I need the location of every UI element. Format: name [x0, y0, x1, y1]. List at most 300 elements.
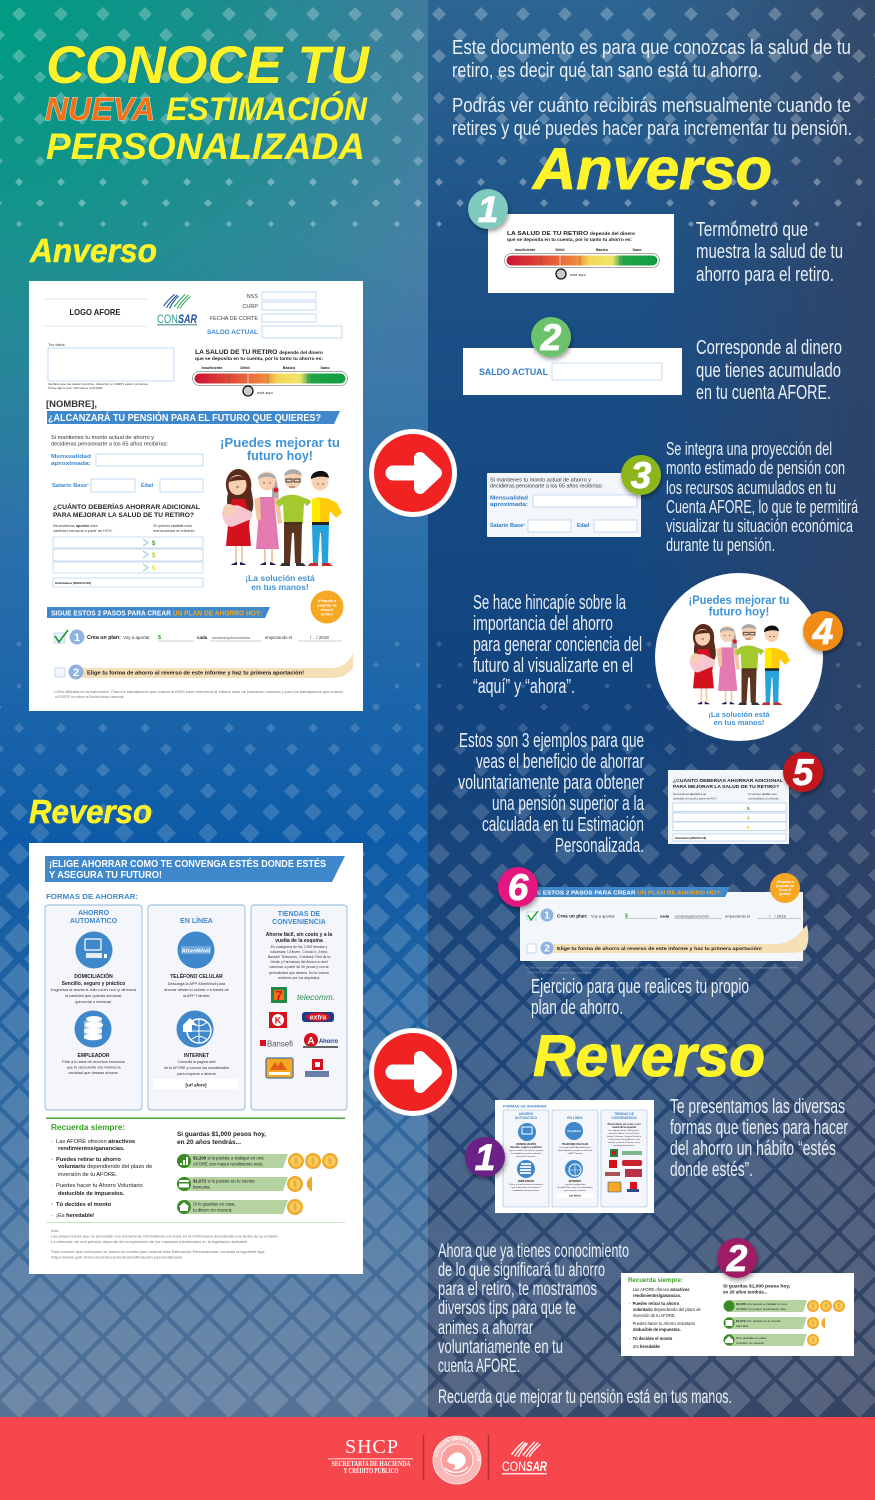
column: ahorro automatico: cantidad que deseas ahorrar. — [68, 1070, 119, 1075]
text: tips: animes a ahorrar — [438, 1318, 533, 1339]
recuerda siempre list — [51, 1123, 152, 1219]
badge r1 — [465, 1137, 505, 1178]
card: formas de ahorrar mini: la cantidad que quieras semanal, — [511, 1152, 542, 1155]
text: proyeccion — [666, 439, 859, 555]
heading: Anverso large: Anverso — [531, 137, 772, 202]
card: thermometer: está aquí — [570, 273, 587, 277]
recuerda siempre list: voluntario dependiendo del plazo de — [58, 1164, 152, 1170]
column: tiendas de conveniencia: comisión por tus depósitos. — [278, 976, 320, 980]
how much to save section: cantidad mensual a partir de HOY: — [53, 528, 112, 533]
how much to save section: $ — [152, 541, 156, 547]
card: recuerda siempre mini: bancaria. — [736, 1324, 749, 1328]
card: thermometer: que se deposita en tu cuenta, por lo tanto tu ahorro es: — [507, 237, 632, 242]
card: recuerda siempre mini: rendimientos/ganancias. — [633, 1293, 681, 1298]
card: formas de ahorrar mini: En cualquiera de las 7,000 tiendas y — [609, 1129, 639, 1132]
card: formas de ahorrar mini: cantidad que deseas ahorrar. — [513, 1189, 540, 1192]
subheading: formas de ahorrar: FORMAS DE AHORRAR: — [46, 892, 138, 901]
card: thermometer: LA SALUD DE TU RETIRO depende del dinero — [507, 231, 636, 237]
pension projection form: Edad — [141, 483, 153, 489]
badge 6: 6 — [508, 867, 529, 908]
footnote on dark — [525, 966, 798, 974]
recuerda siempre list: deducible de impuestos. — [58, 1191, 125, 1197]
panel: reverso document — [29, 843, 363, 1274]
card: formas de ahorrar mini: Ingresa a www.e-sar.com.mx y ahorra — [509, 1149, 544, 1152]
card: ahorro adicional: $ — [747, 806, 750, 811]
background: right panel gradient — [428, 0, 875, 1500]
badge 6 — [498, 867, 538, 908]
bar: cuenta bancaria: bancaria. — [193, 1184, 211, 1190]
icon: computer — [76, 932, 112, 968]
badge 3: 3 — [631, 455, 652, 496]
text: tips: para el retiro, te mostramos — [438, 1279, 597, 1300]
card: plan de ahorro: llena el — [779, 888, 791, 892]
column: ahorro automatico — [45, 905, 142, 1110]
badge 1: 1 — [478, 189, 498, 230]
logo: SHCP: Y CRÉDITO PÚBLICO — [344, 1467, 398, 1475]
pension projection form — [51, 435, 203, 492]
recuerda siempre list: Recuerda siempre: — [51, 1123, 125, 1132]
card: ahorro adicional: cantidad mensual a partir de HOY: — [673, 796, 717, 800]
item 4: futuro — [473, 573, 843, 741]
card: ahorro adicional — [668, 770, 789, 844]
badge r2: 2 — [726, 1238, 748, 1279]
heading: Anverso left: Anverso — [29, 232, 157, 269]
background: left panel gradient — [0, 0, 428, 1500]
card: recuerda siempre mini: · Puedes hacer tu Ahorro Voluntario — [629, 1321, 696, 1326]
step 2: Elige tu forma de ahorro al reverso de este informe y haz tu primera aportación! — [87, 670, 304, 676]
thermometer: que se deposita en tu cuenta, por lo tanto tu ahorro es: — [195, 356, 323, 361]
thermometer: Sano — [320, 366, 330, 370]
card: formas de ahorrar mini: EN LÍNEA — [567, 1115, 583, 1120]
text: tips: voluntariamente en tu — [438, 1337, 563, 1358]
column: tiendas de conveniencia: CONVENIENCIA — [272, 919, 326, 926]
thermometer: está aquí — [257, 391, 274, 395]
notes: Nota: — [51, 1229, 59, 1233]
pension projection form: aproximada: — [51, 461, 91, 467]
badge: poquito a poquito: ¡Poquito a — [318, 599, 337, 603]
card: recuerda siempre mini: deducible de impuestos. — [633, 1327, 681, 1332]
card: plan de ahorro — [520, 873, 808, 961]
card: formas de ahorrar mini: AforeMóvil — [567, 1129, 581, 1133]
text: hincapie — [473, 592, 642, 698]
card: formas de ahorrar mini: AHORRO — [519, 1112, 534, 1116]
card: ahorro adicional: Necesitarías aportar esta — [673, 792, 707, 796]
circle: family callout: ¡La solución está — [708, 710, 770, 719]
column: ahorro automatico: que te descuente vía nómina la — [66, 1064, 121, 1070]
icon: coins — [74, 1010, 112, 1048]
arrow: anverso — [369, 429, 457, 517]
main title: CONOCE TU — [46, 36, 371, 95]
icon: globe — [176, 1010, 214, 1048]
card: thermometer: Básico — [596, 248, 609, 252]
text: tips: diversos tips para que te — [438, 1298, 576, 1319]
how much to save section: $ — [152, 566, 156, 572]
card: proyeccion: aproximada: — [490, 502, 528, 508]
step 1: cada — [197, 635, 208, 640]
text: hincapie: Se hace hincapíe sobre la — [473, 592, 627, 614]
badge 4: 4 — [812, 611, 833, 652]
tus datos box: Verifica que tus datos (nombre, dirección y CURP) estén correctos. — [48, 382, 149, 386]
card: ahorro adicional: PARA MEJORAR LA SALUD DE TU RETIRO? — [673, 784, 779, 789]
text: formas — [670, 1096, 848, 1181]
text: ejemplos: una pensión superior a la — [492, 793, 645, 815]
card: formas de ahorrar mini: Descarga la APP AforeMóvil para — [560, 1146, 591, 1149]
column: tiendas de conveniencia: vuelta de la esquina — [275, 938, 323, 944]
card: recuerda siempre mini: · Tú decides el monto — [629, 1336, 673, 1341]
main title: NUEVA — [45, 91, 155, 127]
recuerda siempre list: · Las AFORE ofrecen atractivos — [51, 1139, 135, 1145]
card: formas de ahorrar mini: AUTOMÁTICO — [515, 1115, 538, 1120]
text: ejercicio: plan de ahorro. — [531, 997, 623, 1019]
pension projection form: Si mantienes tu monto actual de ahorro y — [51, 435, 155, 441]
thermometer: Básico — [283, 366, 296, 370]
banner: elige ahorrar: ¡ELIGE AHORRAR COMO TE CONVENGA ESTÉS DONDE ESTÉS — [49, 857, 326, 870]
logo: SHCP — [328, 1436, 413, 1475]
column: tiendas de conveniencia — [251, 905, 347, 1110]
account fields: FECHA DE CORTE — [210, 316, 258, 322]
card: formas de ahorrar mini: de tu AFORE y conoce las modalidades — [557, 1186, 593, 1189]
card: plan de ahorro: cada — [660, 914, 670, 918]
how much to save section: Si quieres recibir esta — [153, 523, 193, 528]
card: ahorro adicional: $ — [747, 816, 750, 820]
card: formas de ahorrar mini: DOMICILIACIÓN — [516, 1143, 536, 1146]
card: formas de ahorrar mini: FORMAS DE AHORRAR: — [503, 1104, 547, 1108]
consar logo — [157, 294, 197, 326]
card: recuerda siempre mini: Recuerda siempre: — [628, 1278, 683, 1284]
card: ahorro adicional: Kalculadora [DM/2111/18] — [675, 836, 706, 840]
step 2 — [55, 653, 353, 680]
store logos: telecomm. — [297, 992, 335, 1002]
card: formas de ahorrar mini: nacional, a partir de 50 pesos y con la — [608, 1141, 641, 1144]
notes: https://www.gob.mx/consar/documentos/estimacion-personalizada — [51, 1256, 182, 1260]
seal: national emblem: ESTADOS UNIDOS MEXICANOS — [434, 1436, 480, 1462]
consar logo: SAR — [178, 312, 197, 326]
logo: CONSAR: SAR — [526, 1459, 547, 1474]
card: ahorro adicional: ¿CUÁNTO DEBERÍAS AHORRAR ADICIONAL — [673, 776, 783, 783]
banner: elige ahorrar: Y ASEGURA TU FUTURO! — [49, 870, 162, 881]
card: proyeccion: Salario Base¹ — [490, 523, 525, 529]
text: ejemplos: calculada en tu Estimación — [482, 814, 644, 836]
how much to save section — [53, 502, 203, 587]
circle: family callout — [655, 573, 823, 741]
step 1: Crea un plan: — [87, 635, 121, 641]
badge: poquito a poquito: jarrito! — [320, 612, 333, 616]
tus datos box — [48, 343, 174, 390]
account fields: SALDO ACTUAL — [207, 329, 258, 336]
notes: Las proyecciones que se presentan son meramente informativas con base en la información actualizada a la fecha de su emisión. — [51, 1234, 279, 1238]
column: ahorro automatico: quincenal o mensual. — [75, 999, 112, 1004]
column: en linea: de tu AFORE y conoce las modalidades — [164, 1066, 229, 1070]
card: proyeccion: Mensualidad — [490, 496, 528, 502]
card: plan de ahorro: semana/quincena/mes — [675, 914, 709, 918]
card: thermometer: Sano — [632, 248, 642, 252]
panel: anverso document — [29, 281, 363, 711]
logo: SHCP: SECRETARÍA DE HACIENDA — [332, 1460, 411, 1468]
card: proyeccion: Si mantienes tu monto actual de ahorro y — [490, 478, 592, 484]
card: thermometer: Insuficiente — [515, 248, 535, 252]
badge: poquito a poquito — [310, 590, 344, 624]
bar: en casa: Si lo guardas en casa, — [193, 1202, 236, 1206]
column: ahorro automatico: DOMICILIACIÓN — [74, 972, 113, 980]
badge r1: 1 — [475, 1137, 495, 1178]
column: ahorro automatico: Sencillo, seguro y práctico — [62, 981, 125, 987]
card: proyeccion — [487, 473, 641, 537]
text: termometro: Termómetro que — [696, 219, 808, 241]
text: ejemplos — [458, 730, 645, 857]
step 1: Voy a aportar — [123, 635, 150, 640]
card: recuerda siempre mini: · Puedes retirar tu ahorro — [629, 1301, 680, 1306]
badge: poquito a poquito: llena el — [321, 608, 333, 612]
card: proyeccion: Edad — [577, 523, 589, 529]
heading: Reverso left: Reverso — [29, 793, 152, 830]
footnote on dark: al ISSSTE se refiere al Sueldo básico mensual. — [527, 970, 592, 974]
text: termometro — [696, 219, 843, 286]
card: formas de ahorrar mini: Gente y Farmacias del Ahorro a nivel — [608, 1138, 640, 1141]
column: tiendas de conveniencia: TIENDAS DE — [278, 911, 321, 918]
card: ahorro adicional: mensualidad al retirarse: — [748, 796, 780, 800]
text: formas: donde estés”. — [670, 1159, 753, 1181]
thermometer: Insuficiente — [201, 366, 223, 370]
column: tiendas de conveniencia: Ahorra fácil, sin costo y a la — [266, 932, 332, 938]
card: recuerda siempre mini: voluntario dependiendo del plazo de — [633, 1307, 702, 1312]
bar: en casa — [177, 1199, 303, 1215]
callout: puedes mejorar: ¡Puedes mejorar tu — [220, 436, 340, 450]
intro text — [452, 37, 852, 140]
column: en linea: la APP Transfer — [183, 993, 211, 998]
card: formas de ahorrar mini — [495, 1100, 654, 1213]
footnote: ¹ Cifra utilizada en la estimación. Para los trabajadores que cotizan al IMSS hace referencia al Salario base de cotización mensual y para los trabajadores que cotizan — [53, 690, 343, 694]
text: hincapie: para generar conciencia del — [473, 634, 642, 656]
text: proyeccion: durante tu pensión. — [666, 535, 775, 555]
text: ejemplos: voluntariamente para obtener — [458, 772, 644, 794]
account fields: NSS — [247, 294, 258, 300]
column: tiendas de conveniencia: Gente y Farmacias del Ahorro a nivel — [270, 960, 328, 964]
card: plan de ahorro: jarrito! — [778, 892, 791, 896]
closing text: Recuerda que mejorar tu pensión está en tus manos. — [438, 1387, 732, 1408]
circle: family callout: ¡Puedes mejorar tu — [688, 595, 790, 607]
card: recuerda siempre mini: Si guardas $1,000 pesos hoy, — [723, 1284, 790, 1288]
badge r2 — [717, 1238, 757, 1279]
footer dividers — [424, 1435, 488, 1480]
column: en linea: TELÉFONO CELULAR — [170, 972, 223, 980]
card: recuerda siempre mini: · ¡Es heredable! — [629, 1344, 660, 1349]
column: tiendas de conveniencia: En cualquiera de las 7,000 tiendas y — [271, 945, 327, 949]
text: ejemplos: Estos son 3 ejemplos para que — [459, 730, 644, 752]
tus datos box: Tus datos: — [48, 343, 66, 347]
badge: poquito a poquito: poquito se — [317, 604, 337, 608]
badge 2 — [531, 317, 571, 358]
card: formas de ahorrar mini: vuelta de la esquina — [612, 1126, 636, 1129]
seal: national emblem — [432, 1436, 482, 1484]
divider: recuerda — [46, 1118, 345, 1119]
card: formas de ahorrar mini: TELÉFONO CELULAR — [562, 1143, 588, 1146]
store logos: extra — [310, 1014, 326, 1022]
step 2: 2 — [73, 667, 79, 679]
tus datos box: Si hay algún error, infórmalo a tu AFORE. — [48, 386, 103, 390]
card: formas de ahorrar mini: para empezar a ahorrar — [564, 1190, 586, 1192]
column: tiendas de conveniencia: periodicidad que desees. No te cobran — [269, 971, 329, 975]
card: formas de ahorrar mini: Ahorra fácil, sin costo y a la — [607, 1123, 641, 1126]
heading: Reverso large: Reverso — [533, 1024, 765, 1089]
card: formas de ahorrar mini: CONVENIENCIA — [611, 1116, 637, 1120]
card: plan de ahorro: Elige tu forma de ahorro al reverso de este informe y haz tu primera aportación! — [557, 946, 762, 952]
main title: ESTIMACIÓN — [166, 91, 368, 127]
nombre: [NOMBRE], — [46, 399, 97, 410]
pension projection form: Mensualidad — [51, 454, 91, 460]
card: recuerda siempre mini: AFORE con mayor rendimiento neto. — [736, 1307, 787, 1311]
logo: CONSAR: CON — [502, 1459, 526, 1474]
card: plan de ahorro: Voy a aportar — [591, 914, 615, 918]
text: ejercicio: Ejercicio para que realices tu propio — [531, 976, 749, 998]
card: saldo — [463, 348, 682, 395]
savings comparison: Si guardas $1,000 pesos hoy, — [177, 1132, 266, 1138]
item 6: ejercicio — [498, 867, 808, 1019]
card: thermometer — [488, 214, 674, 293]
text: hincapie: “aquí” y “ahora”. — [473, 676, 575, 698]
column: en linea: ahorrar desde tu celular o a través de — [164, 987, 229, 992]
store logos: 7 — [275, 988, 283, 1003]
column: ahorro automatico: AUTOMÁTICO — [70, 916, 118, 925]
banner: alcanzara tu pension: ¿ALCANZARÁ TU PENSIÓN PARA EL FUTURO QUE QUIERES? — [48, 411, 321, 424]
illustration: family — [222, 469, 342, 566]
badge 2: 2 — [540, 317, 562, 358]
card: formas de ahorrar mini: que te descuente vía nómina la — [512, 1186, 541, 1189]
how much to save section: ¿CUÁNTO DEBERÍAS AHORRAR ADICIONAL — [53, 502, 200, 511]
card: plan de ahorro: Crea un plan: — [557, 914, 588, 920]
reverso item 2: tips — [438, 1238, 854, 1377]
column: ahorro automatico: AHORRO — [78, 910, 110, 917]
card: plan de ahorro: / / 2018 — [769, 914, 786, 918]
text: tips: cuenta AFORE. — [438, 1356, 520, 1377]
card: recuerda siempre mini: $2,200 si lo pusiste a trabajar en una — [736, 1302, 787, 1306]
footnote: al ISSSTE se refiere al Sueldo básico mensual. — [55, 695, 124, 699]
step 1: $ — [158, 635, 161, 641]
card: plan de ahorro: 2 — [544, 944, 550, 954]
card: plan de ahorro: 1 — [544, 910, 550, 922]
banner: sigue estos 2 pasos: SIGUE ESTOS 2 PASOS PARA CREAR UN PLAN DE AHORRO HOY: — [51, 610, 262, 618]
card: recuerda siempre mini: en 20 años tendrás... — [723, 1290, 768, 1294]
card: formas de ahorrar mini: EMPLEADOR — [518, 1180, 534, 1183]
store logos: Bansefi — [267, 1040, 293, 1048]
text: tips: Ahora que ya tienes conocimiento — [438, 1241, 629, 1262]
card: plan de ahorro: empezando el — [725, 914, 750, 918]
thermometer: LA SALUD DE TU RETIRO depende del dinero — [195, 350, 323, 356]
card: formas de ahorrar mini: [url afore] — [569, 1194, 581, 1198]
callout: puedes mejorar — [220, 436, 340, 463]
main title: PERSONALIZADA — [46, 126, 365, 167]
bar: en casa: tu dinero no crecerá. — [193, 1208, 232, 1212]
recuerda siempre list: · ¡Es heredable! — [51, 1213, 95, 1219]
card: saldo: SALDO ACTUAL — [479, 367, 548, 377]
badge 5: 5 — [793, 752, 815, 793]
store logos: A — [307, 1036, 315, 1047]
bar: cuenta bancaria — [177, 1176, 312, 1192]
arrow: reverso — [369, 1028, 457, 1116]
bar: afore: AFORE con mayor rendimiento neto. — [193, 1162, 263, 1166]
step 1: / / 2018 — [310, 635, 329, 640]
text: ejemplos: veas el beneficio de ahorrar — [476, 751, 644, 773]
circle: family callout: en tus manos! — [714, 718, 764, 727]
icon: afore movil: AforeMóvil — [182, 948, 211, 954]
step 1: 1 — [74, 632, 80, 644]
card: formas de ahorrar mini: Pide a tu área de recursos humanos — [509, 1183, 543, 1186]
badge 1 — [468, 189, 508, 230]
store logos: Ahorro — [319, 1039, 338, 1045]
logo afore label: LOGO AFORE — [70, 307, 121, 317]
column: en linea: [url afore] — [185, 1082, 207, 1088]
recuerda siempre list: · Puedes hacer tu Ahorro Voluntario — [51, 1183, 143, 1189]
savings comparison — [177, 1132, 338, 1215]
card: recuerda siempre mini: tu dinero no crecerá. — [736, 1341, 765, 1345]
card: formas de ahorrar mini: periodicidad que desees. — [613, 1144, 635, 1147]
step 1: semana/quincena/mes — [212, 636, 250, 640]
account fields: CURP — [242, 304, 258, 310]
recuerda siempre list: · Tú decides el monto — [51, 1202, 112, 1208]
column: ahorro automatico: Ingresa a www.e-sar.com.mx y ahorra — [51, 987, 137, 992]
notes: La obtención de una pensión depende del cumplimiento de los requisitos establecidos en la legislación aplicable. — [51, 1240, 248, 1244]
column: tiendas de conveniencia: Bansefi, Telecomm, Chedraui, Red de la — [268, 955, 330, 959]
badge 5 — [783, 752, 823, 793]
bar: cuenta bancaria: $1,072 si lo pusiste en tu cuenta — [193, 1178, 255, 1184]
card: proyeccion: decidieras pensionarte a los 65 años recibirías: — [490, 484, 603, 490]
icon: afore movil — [178, 932, 214, 968]
column: en linea: Descarga la APP AforeMóvil para — [168, 981, 226, 986]
how much to save section: PARA MEJORAR LA SALUD DE TU RETIRO? — [53, 512, 194, 519]
logo: SHCP: SHCP — [345, 1436, 398, 1458]
card: formas de ahorrar mini: Sencillo, seguro y práctico — [510, 1146, 542, 1149]
card: recuerda siempre mini: $1,072 si lo pusiste en tu cuenta — [736, 1319, 781, 1323]
intro text: retiro, es decir qué tan sano está tu ahorro. — [452, 60, 762, 82]
reverso item 1: formas — [465, 1096, 848, 1213]
how much to save section: Necesitarías aportar esta — [53, 523, 98, 528]
bar: afore: $2,200 si lo pusiste a trabajar en una — [193, 1156, 264, 1160]
card: formas de ahorrar mini: TIENDAS DE — [614, 1112, 635, 1116]
card: formas de ahorrar mini: la APP Transfer — [568, 1152, 583, 1155]
card: formas de ahorrar mini: quincenal o mensual. — [516, 1156, 536, 1158]
pension projection form: Salario Base¹ — [52, 483, 89, 489]
card: plan de ahorro: ¡Poquito a — [776, 880, 794, 884]
item 5: ejemplos — [458, 730, 823, 857]
text: hincapie: futuro al visualizarte en el — [473, 655, 633, 677]
notes: Para conocer qué conceptos se toman en cuenta para realizar esta Estimación Personalizada, consulta la siguiente liga: — [51, 1250, 265, 1254]
footnote on dark: ¹ Cifra utilizada en la estimación. Para los trabajadores que cotizan al IMSS hace referencia al Salario base de cotización mensual y para los trabajadores que cotizan — [525, 966, 798, 970]
store logos — [260, 987, 338, 1078]
callout: la solucion: ¡La solución está — [245, 573, 315, 583]
card: ahorro adicional: $ — [747, 825, 750, 830]
notes — [46, 1222, 345, 1260]
column: en linea — [148, 905, 245, 1110]
column: ahorro automatico: la cantidad que quieras semanal, — [65, 993, 122, 998]
step 1 — [54, 630, 342, 644]
badge 3 — [621, 455, 661, 496]
card: recuerda siempre mini: Si lo guardas en casa, — [736, 1336, 767, 1340]
text: ejercicio — [531, 976, 749, 1019]
footnote — [53, 690, 343, 699]
card: formas de ahorrar mini: naturistas 7-Eleven, Círculo K, Extra, — [608, 1132, 640, 1135]
text: tips — [438, 1241, 629, 1377]
card: formas de ahorrar mini: Consulta la página web — [565, 1183, 586, 1186]
store logos: K — [275, 1016, 282, 1026]
savings comparison: en 20 años tendrás... — [177, 1140, 241, 1146]
column: ahorro automatico: EMPLEADOR — [78, 1053, 110, 1059]
card: thermometer: Débil — [555, 248, 565, 252]
how much to save section: Kalculadora [DM/2111/18] — [55, 581, 91, 585]
bar: afore — [177, 1153, 338, 1169]
item 2: saldo actual — [463, 317, 842, 404]
banner: sigue estos 2 pasos — [47, 607, 270, 618]
how much to save section: mensualidad al retirarse: — [153, 528, 196, 533]
callout: la solucion — [245, 573, 315, 592]
